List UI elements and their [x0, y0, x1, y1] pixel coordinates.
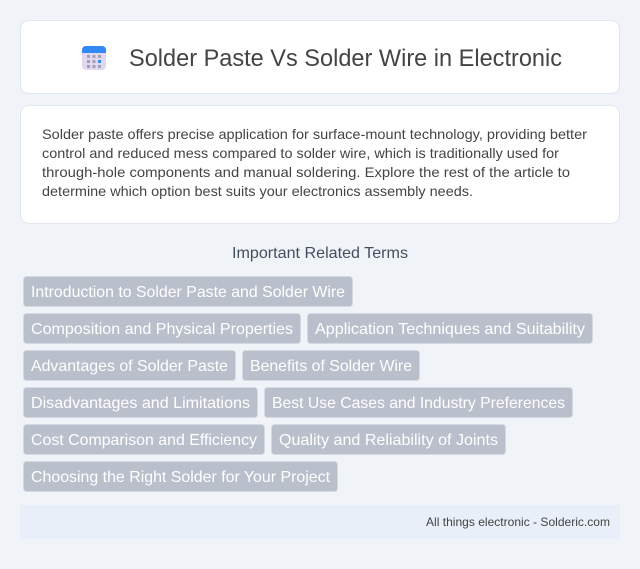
footer credit: All things electronic - Solderic.com	[426, 515, 610, 529]
footer	[20, 505, 620, 539]
tag: application: Application Techniques and Suitability	[315, 321, 585, 338]
tag: cost	[24, 424, 264, 454]
text block: introduction paragraph: Solder paste offers precise application for surface-mount technology, providing better	[42, 126, 587, 142]
text block: introduction paragraph: control and reduced mess compared to solder wire, which is traditionally used for	[42, 145, 559, 161]
tag: choosing: Choosing the Right Solder for Your Project	[31, 469, 331, 486]
tag: disadvantages	[24, 388, 258, 418]
tag: benefits: Benefits of Solder Wire	[250, 358, 412, 375]
text block: introduction paragraph: determine which option best suits your electronics assembly needs.	[42, 183, 473, 199]
heading: related terms: Important Related Terms	[232, 245, 408, 262]
tag: disadvantages: Disadvantages and Limitations	[31, 395, 250, 412]
tag: best use cases	[264, 388, 572, 418]
tag: application	[308, 314, 592, 344]
title: Solder Paste Vs Solder Wire in Electronic	[129, 45, 562, 72]
icon: calendar	[82, 46, 106, 70]
tag: best use cases: Best Use Cases and Industry Preferences	[272, 395, 565, 412]
text block: introduction paragraph	[42, 126, 587, 199]
tag: quality	[272, 424, 506, 454]
tag: quality: Quality and Reliability of Joints	[279, 432, 498, 449]
tag: introduction: Introduction to Solder Paste and Solder Wire	[31, 284, 345, 301]
tag: advantages: Advantages of Solder Paste	[31, 358, 228, 375]
tag: benefits	[242, 350, 420, 380]
tag: composition: Composition and Physical Properties	[31, 321, 293, 338]
panel: term tags	[24, 276, 592, 492]
tag: introduction	[24, 276, 352, 306]
text block: introduction paragraph: through-hole components and manual soldering. Explore the rest of the article to	[42, 164, 570, 180]
panel: introduction	[20, 106, 620, 224]
tag: cost: Cost Comparison and Efficiency	[31, 432, 257, 449]
tag: composition	[24, 314, 300, 344]
tag: choosing	[24, 462, 338, 492]
tag: advantages	[24, 350, 236, 380]
panel: header	[20, 20, 620, 94]
